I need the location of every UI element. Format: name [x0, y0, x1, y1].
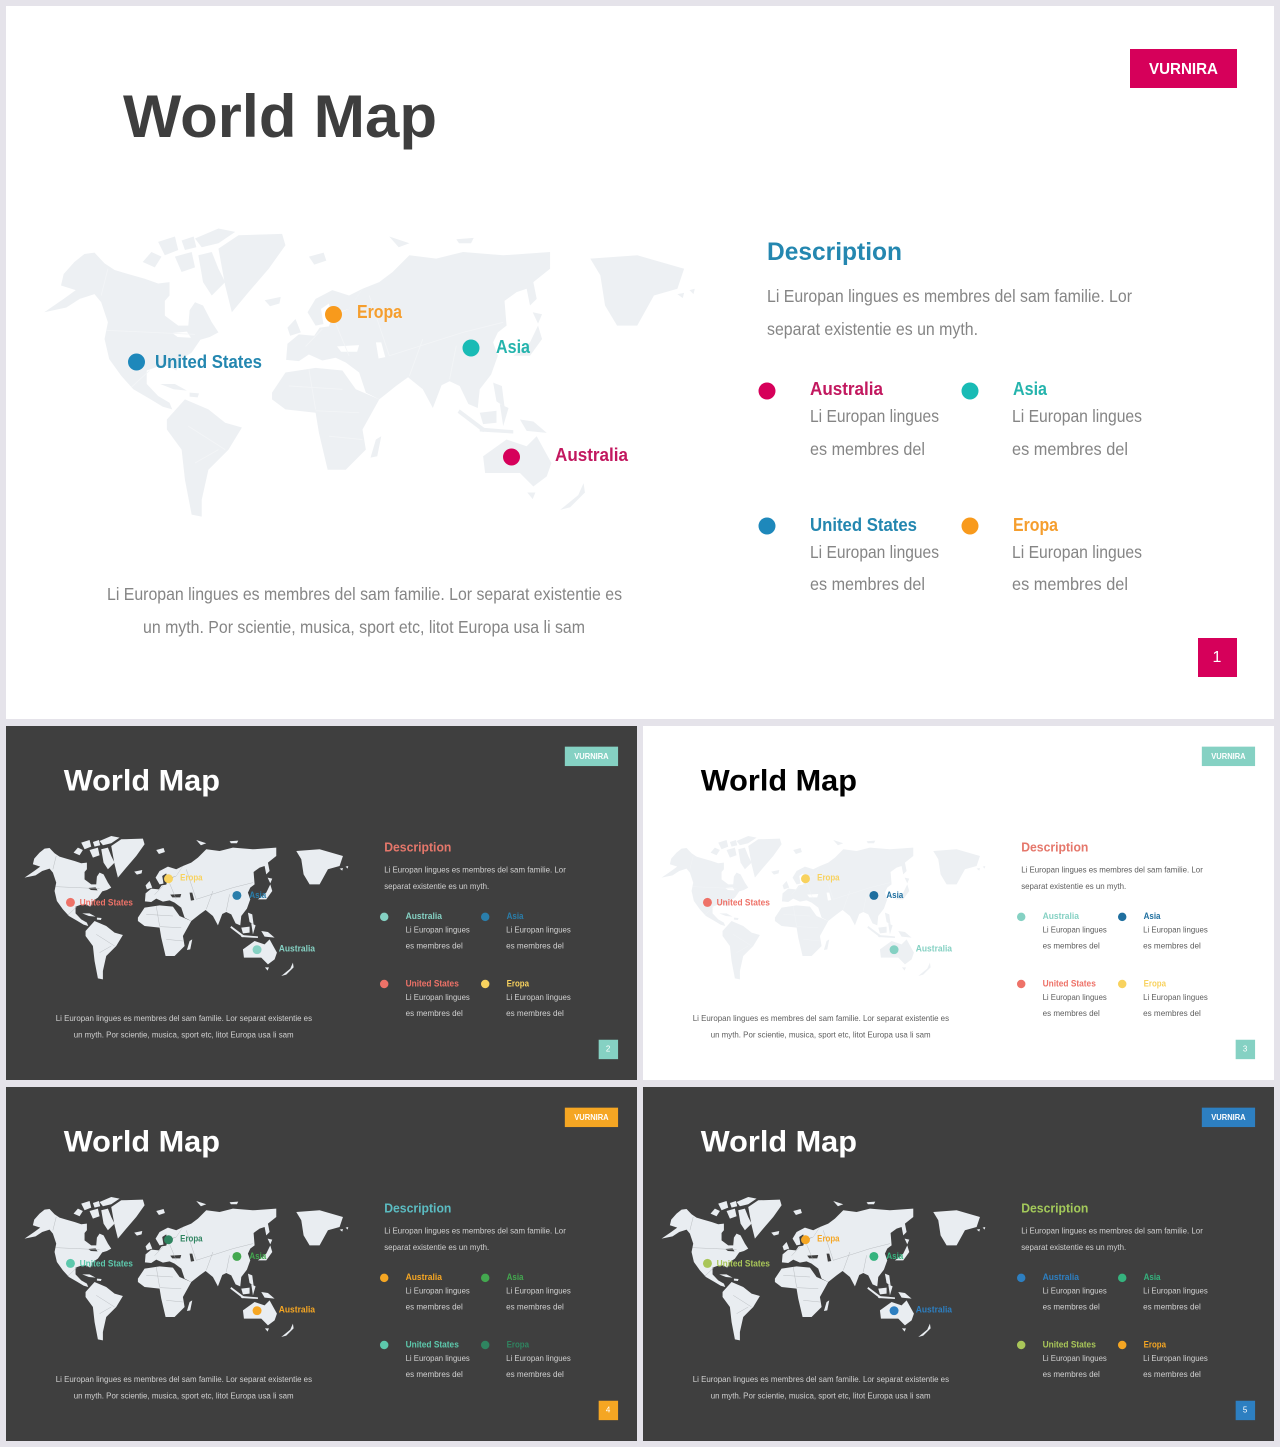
- map marker: Australia: [253, 1305, 316, 1315]
- map caption: un myth. Por scientie, musica, sport etc, litot Europa usa li sam: [711, 1029, 931, 1039]
- description text: separat existentie es un myth.: [1021, 881, 1126, 891]
- map caption: Li Europan lingues es membres del sam familie. Lor separat existentie es: [693, 1374, 950, 1384]
- description text: [1021, 865, 1203, 891]
- description text: [767, 286, 1132, 339]
- legend: [1017, 911, 1208, 1018]
- legend item: United States: [380, 978, 470, 1018]
- legend item: United States: [380, 1339, 470, 1379]
- map caption: Li Europan lingues es membres del sam familie. Lor separat existentie es: [56, 1013, 313, 1023]
- description text: Li Europan lingues es membres del sam familie. Lor: [384, 865, 566, 875]
- legend item: Asia: Li Europan lingues: [506, 924, 571, 934]
- legend item: Asia: es membres del: [1012, 439, 1128, 459]
- map marker: United States: United States: [717, 897, 770, 907]
- legend item: Asia: Li Europan lingues: [506, 1285, 571, 1295]
- map marker: Eropa: Eropa: [180, 1234, 203, 1244]
- legend item: Asia: [481, 1272, 571, 1312]
- legend item: Australia: Australia: [1043, 911, 1080, 921]
- map marker: Eropa: Eropa: [180, 873, 203, 883]
- legend item: Australia: [380, 911, 470, 951]
- legend item: United States: Li Europan lingues: [1043, 1353, 1107, 1363]
- description heading: Description: [1021, 1202, 1088, 1216]
- description text: Li Europan lingues es membres del sam familie. Lor: [384, 1226, 566, 1236]
- legend item: United States: [758, 515, 939, 594]
- map marker: Australia: [890, 944, 953, 954]
- description heading: Description: [1021, 841, 1088, 855]
- legend item: United States: United States: [1043, 1339, 1096, 1349]
- legend item: Asia: Asia: [1013, 379, 1048, 399]
- legend item: Asia: [1118, 1272, 1208, 1312]
- description text: Li Europan lingues es membres del sam familie. Lor: [767, 286, 1132, 306]
- legend item: United States: United States: [406, 978, 459, 988]
- legend item: Eropa: es membres del: [506, 1369, 564, 1379]
- legend item: Australia: [1017, 911, 1107, 951]
- map caption: [693, 1013, 950, 1039]
- map marker: Asia: [462, 337, 531, 357]
- legend: [380, 1272, 571, 1379]
- page number: [1236, 1401, 1255, 1420]
- map marker: Australia: Australia: [279, 1305, 316, 1315]
- map caption: [56, 1013, 313, 1039]
- map marker: Eropa: Eropa: [817, 1234, 840, 1244]
- legend item: United States: Li Europan lingues: [406, 1353, 470, 1363]
- legend: [758, 379, 1142, 594]
- legend item: Australia: es membres del: [1043, 941, 1100, 951]
- legend item: Eropa: Li Europan lingues: [1012, 542, 1142, 562]
- panel: dark slide 2: [6, 726, 637, 1080]
- legend item: United States: es membres del: [1043, 1369, 1100, 1379]
- legend item: Asia: Li Europan lingues: [1143, 1285, 1208, 1295]
- legend item: Eropa: Eropa: [1144, 978, 1167, 988]
- legend: [380, 911, 571, 1018]
- description text: separat existentie es un myth.: [384, 881, 489, 891]
- legend item: United States: es membres del: [406, 1369, 463, 1379]
- legend item: United States: United States: [406, 1339, 459, 1349]
- map marker: Asia: Asia: [886, 890, 904, 900]
- brand badge: VURNIRA: [1211, 752, 1246, 761]
- legend item: Eropa: Li Europan lingues: [1143, 992, 1208, 1002]
- map marker: Eropa: [325, 302, 403, 323]
- legend item: United States: es membres del: [1043, 1008, 1100, 1018]
- legend item: Australia: Li Europan lingues: [1043, 1285, 1107, 1295]
- legend item: Eropa: Li Europan lingues: [506, 992, 571, 1002]
- page number: [599, 1040, 618, 1059]
- legend item: Asia: Asia: [1144, 911, 1161, 921]
- map marker: Australia: Australia: [279, 944, 316, 954]
- description text: separat existentie es un myth.: [384, 1242, 489, 1252]
- legend item: Australia: Australia: [406, 911, 443, 921]
- legend item: United States: Li Europan lingues: [406, 992, 470, 1002]
- legend item: Asia: Asia: [507, 1272, 524, 1282]
- legend item: United States: United States: [1043, 978, 1096, 988]
- legend item: Australia: Li Europan lingues: [406, 924, 470, 934]
- legend item: United States: [1017, 1339, 1107, 1379]
- map marker: United States: United States: [155, 352, 262, 372]
- brand badge: VURNIRA: [1211, 1113, 1246, 1122]
- map marker: Australia: [253, 944, 316, 954]
- legend item: Australia: Australia: [406, 1272, 443, 1282]
- legend item: United States: Li Europan lingues: [810, 542, 939, 562]
- legend item: Asia: Asia: [1144, 1272, 1161, 1282]
- legend item: Australia: Australia: [810, 379, 884, 399]
- map marker: Australia: Australia: [555, 445, 629, 465]
- legend item: Asia: Asia: [507, 911, 524, 921]
- page number: [1198, 638, 1237, 677]
- world map: [662, 836, 985, 979]
- title: World Map: [701, 1125, 857, 1158]
- legend item: Eropa: Li Europan lingues: [506, 1353, 571, 1363]
- map marker: Asia: [869, 1251, 904, 1261]
- description heading: Description: [384, 841, 451, 855]
- map marker: Asia: [869, 890, 904, 900]
- map caption: Li Europan lingues es membres del sam familie. Lor separat existentie es: [693, 1013, 950, 1023]
- page number: 1: [1213, 649, 1222, 666]
- legend item: Eropa: Eropa: [507, 1339, 530, 1349]
- legend item: Australia: [758, 379, 939, 459]
- legend item: United States: es membres del: [810, 574, 925, 594]
- legend item: Asia: es membres del: [1143, 1302, 1201, 1312]
- map caption: [56, 1374, 313, 1400]
- page number: [1236, 1040, 1255, 1059]
- legend item: Eropa: Eropa: [507, 978, 530, 988]
- map caption: un myth. Por scientie, musica, sport etc, litot Europa usa li sam: [711, 1390, 931, 1400]
- legend item: Australia: es membres del: [1043, 1302, 1100, 1312]
- legend item: Asia: Li Europan lingues: [1143, 924, 1208, 934]
- legend item: Australia: es membres del: [406, 941, 463, 951]
- legend item: Eropa: [1118, 978, 1208, 1018]
- description text: [384, 865, 566, 891]
- brand badge: VURNIRA: [574, 752, 609, 761]
- legend item: Australia: Australia: [1043, 1272, 1080, 1282]
- panel: main white slide: [6, 6, 1274, 719]
- map marker: Eropa: [801, 873, 840, 883]
- map marker: Eropa: [801, 1234, 840, 1244]
- map marker: Asia: Asia: [249, 890, 267, 900]
- description heading: Description: [384, 1202, 451, 1216]
- map marker: Australia: Australia: [916, 944, 953, 954]
- map caption: un myth. Por scientie, musica, sport etc, litot Europa usa li sam: [143, 617, 585, 637]
- description text: Li Europan lingues es membres del sam familie. Lor: [1021, 865, 1203, 875]
- legend item: Asia: Li Europan lingues: [1012, 406, 1142, 426]
- legend: [1017, 1272, 1208, 1379]
- brand badge: [565, 1108, 618, 1127]
- legend item: Eropa: es membres del: [1143, 1008, 1201, 1018]
- description text: separat existentie es un myth.: [1021, 1242, 1126, 1252]
- description text: Li Europan lingues es membres del sam familie. Lor: [1021, 1226, 1203, 1236]
- legend item: Eropa: es membres del: [1143, 1369, 1201, 1379]
- world map: [25, 1197, 348, 1340]
- brand badge: VURNIRA: [574, 1113, 609, 1122]
- world map: [25, 836, 348, 979]
- title: World Map: [701, 764, 857, 797]
- world map: [44, 228, 695, 517]
- panel: dark slide 4: [6, 1087, 637, 1441]
- map marker: Asia: [232, 890, 267, 900]
- legend item: Australia: [1017, 1272, 1107, 1312]
- legend item: Eropa: es membres del: [506, 1008, 564, 1018]
- brand badge: VURNIRA: [1149, 61, 1218, 78]
- legend item: Australia: Li Europan lingues: [406, 1285, 470, 1295]
- legend item: Asia: es membres del: [1143, 941, 1201, 951]
- page number: 2: [606, 1045, 611, 1054]
- map marker: Eropa: [164, 873, 203, 883]
- map caption: [693, 1374, 950, 1400]
- legend item: Eropa: [962, 515, 1142, 594]
- world map: [662, 1197, 985, 1340]
- legend item: Asia: [481, 911, 571, 951]
- page number: [599, 1401, 618, 1420]
- legend item: United States: Li Europan lingues: [1043, 992, 1107, 1002]
- legend item: Australia: es membres del: [810, 439, 925, 459]
- brand badge: [1202, 747, 1255, 766]
- description heading: Description: [767, 238, 902, 266]
- page number: 4: [606, 1406, 611, 1415]
- legend item: Australia: Li Europan lingues: [810, 406, 939, 426]
- panel: white slide 3: [643, 726, 1274, 1080]
- legend item: Eropa: [481, 1339, 571, 1379]
- map marker: United States: United States: [80, 897, 133, 907]
- map marker: Eropa: Eropa: [357, 302, 403, 322]
- legend item: Eropa: es membres del: [1012, 574, 1128, 594]
- brand badge: [1202, 1108, 1255, 1127]
- legend item: United States: es membres del: [406, 1008, 463, 1018]
- legend item: Australia: [380, 1272, 470, 1312]
- map marker: Australia: Australia: [916, 1305, 953, 1315]
- legend item: Australia: es membres del: [406, 1302, 463, 1312]
- description text: [1021, 1226, 1203, 1252]
- map caption: un myth. Por scientie, musica, sport etc, litot Europa usa li sam: [74, 1390, 294, 1400]
- legend item: Eropa: [1118, 1339, 1208, 1379]
- legend item: United States: [1017, 978, 1107, 1018]
- map marker: United States: United States: [80, 1258, 133, 1268]
- legend item: Asia: es membres del: [506, 1302, 564, 1312]
- title: World Map: [64, 1125, 220, 1158]
- map marker: Eropa: Eropa: [817, 873, 840, 883]
- legend item: Eropa: Eropa: [1144, 1339, 1167, 1349]
- panel: dark slide 5: [643, 1087, 1274, 1441]
- map caption: [107, 584, 622, 637]
- map caption: un myth. Por scientie, musica, sport etc, litot Europa usa li sam: [74, 1029, 294, 1039]
- legend item: Eropa: Eropa: [1013, 515, 1059, 535]
- map marker: Asia: Asia: [249, 1251, 267, 1261]
- legend item: United States: United States: [810, 515, 917, 535]
- map caption: Li Europan lingues es membres del sam familie. Lor separat existentie es: [107, 584, 622, 604]
- brand badge: [565, 747, 618, 766]
- title: World Map: [123, 83, 437, 150]
- description text: [384, 1226, 566, 1252]
- title: World Map: [64, 764, 220, 797]
- description text: separat existentie es un myth.: [767, 319, 978, 339]
- legend item: Asia: es membres del: [506, 941, 564, 951]
- map marker: United States: United States: [717, 1258, 770, 1268]
- map marker: Asia: [232, 1251, 267, 1261]
- legend item: Australia: Li Europan lingues: [1043, 924, 1107, 934]
- map caption: Li Europan lingues es membres del sam familie. Lor separat existentie es: [56, 1374, 313, 1384]
- map marker: Eropa: [164, 1234, 203, 1244]
- page number: 3: [1243, 1045, 1248, 1054]
- legend item: Eropa: Li Europan lingues: [1143, 1353, 1208, 1363]
- map marker: Asia: Asia: [496, 337, 531, 357]
- map marker: Asia: Asia: [886, 1251, 904, 1261]
- legend item: Eropa: [481, 978, 571, 1018]
- legend item: Asia: [1118, 911, 1208, 951]
- page number: 5: [1243, 1406, 1248, 1415]
- map marker: Australia: [890, 1305, 953, 1315]
- brand badge: [1130, 49, 1237, 88]
- map marker: Australia: [503, 445, 629, 466]
- legend item: Asia: [962, 379, 1142, 459]
